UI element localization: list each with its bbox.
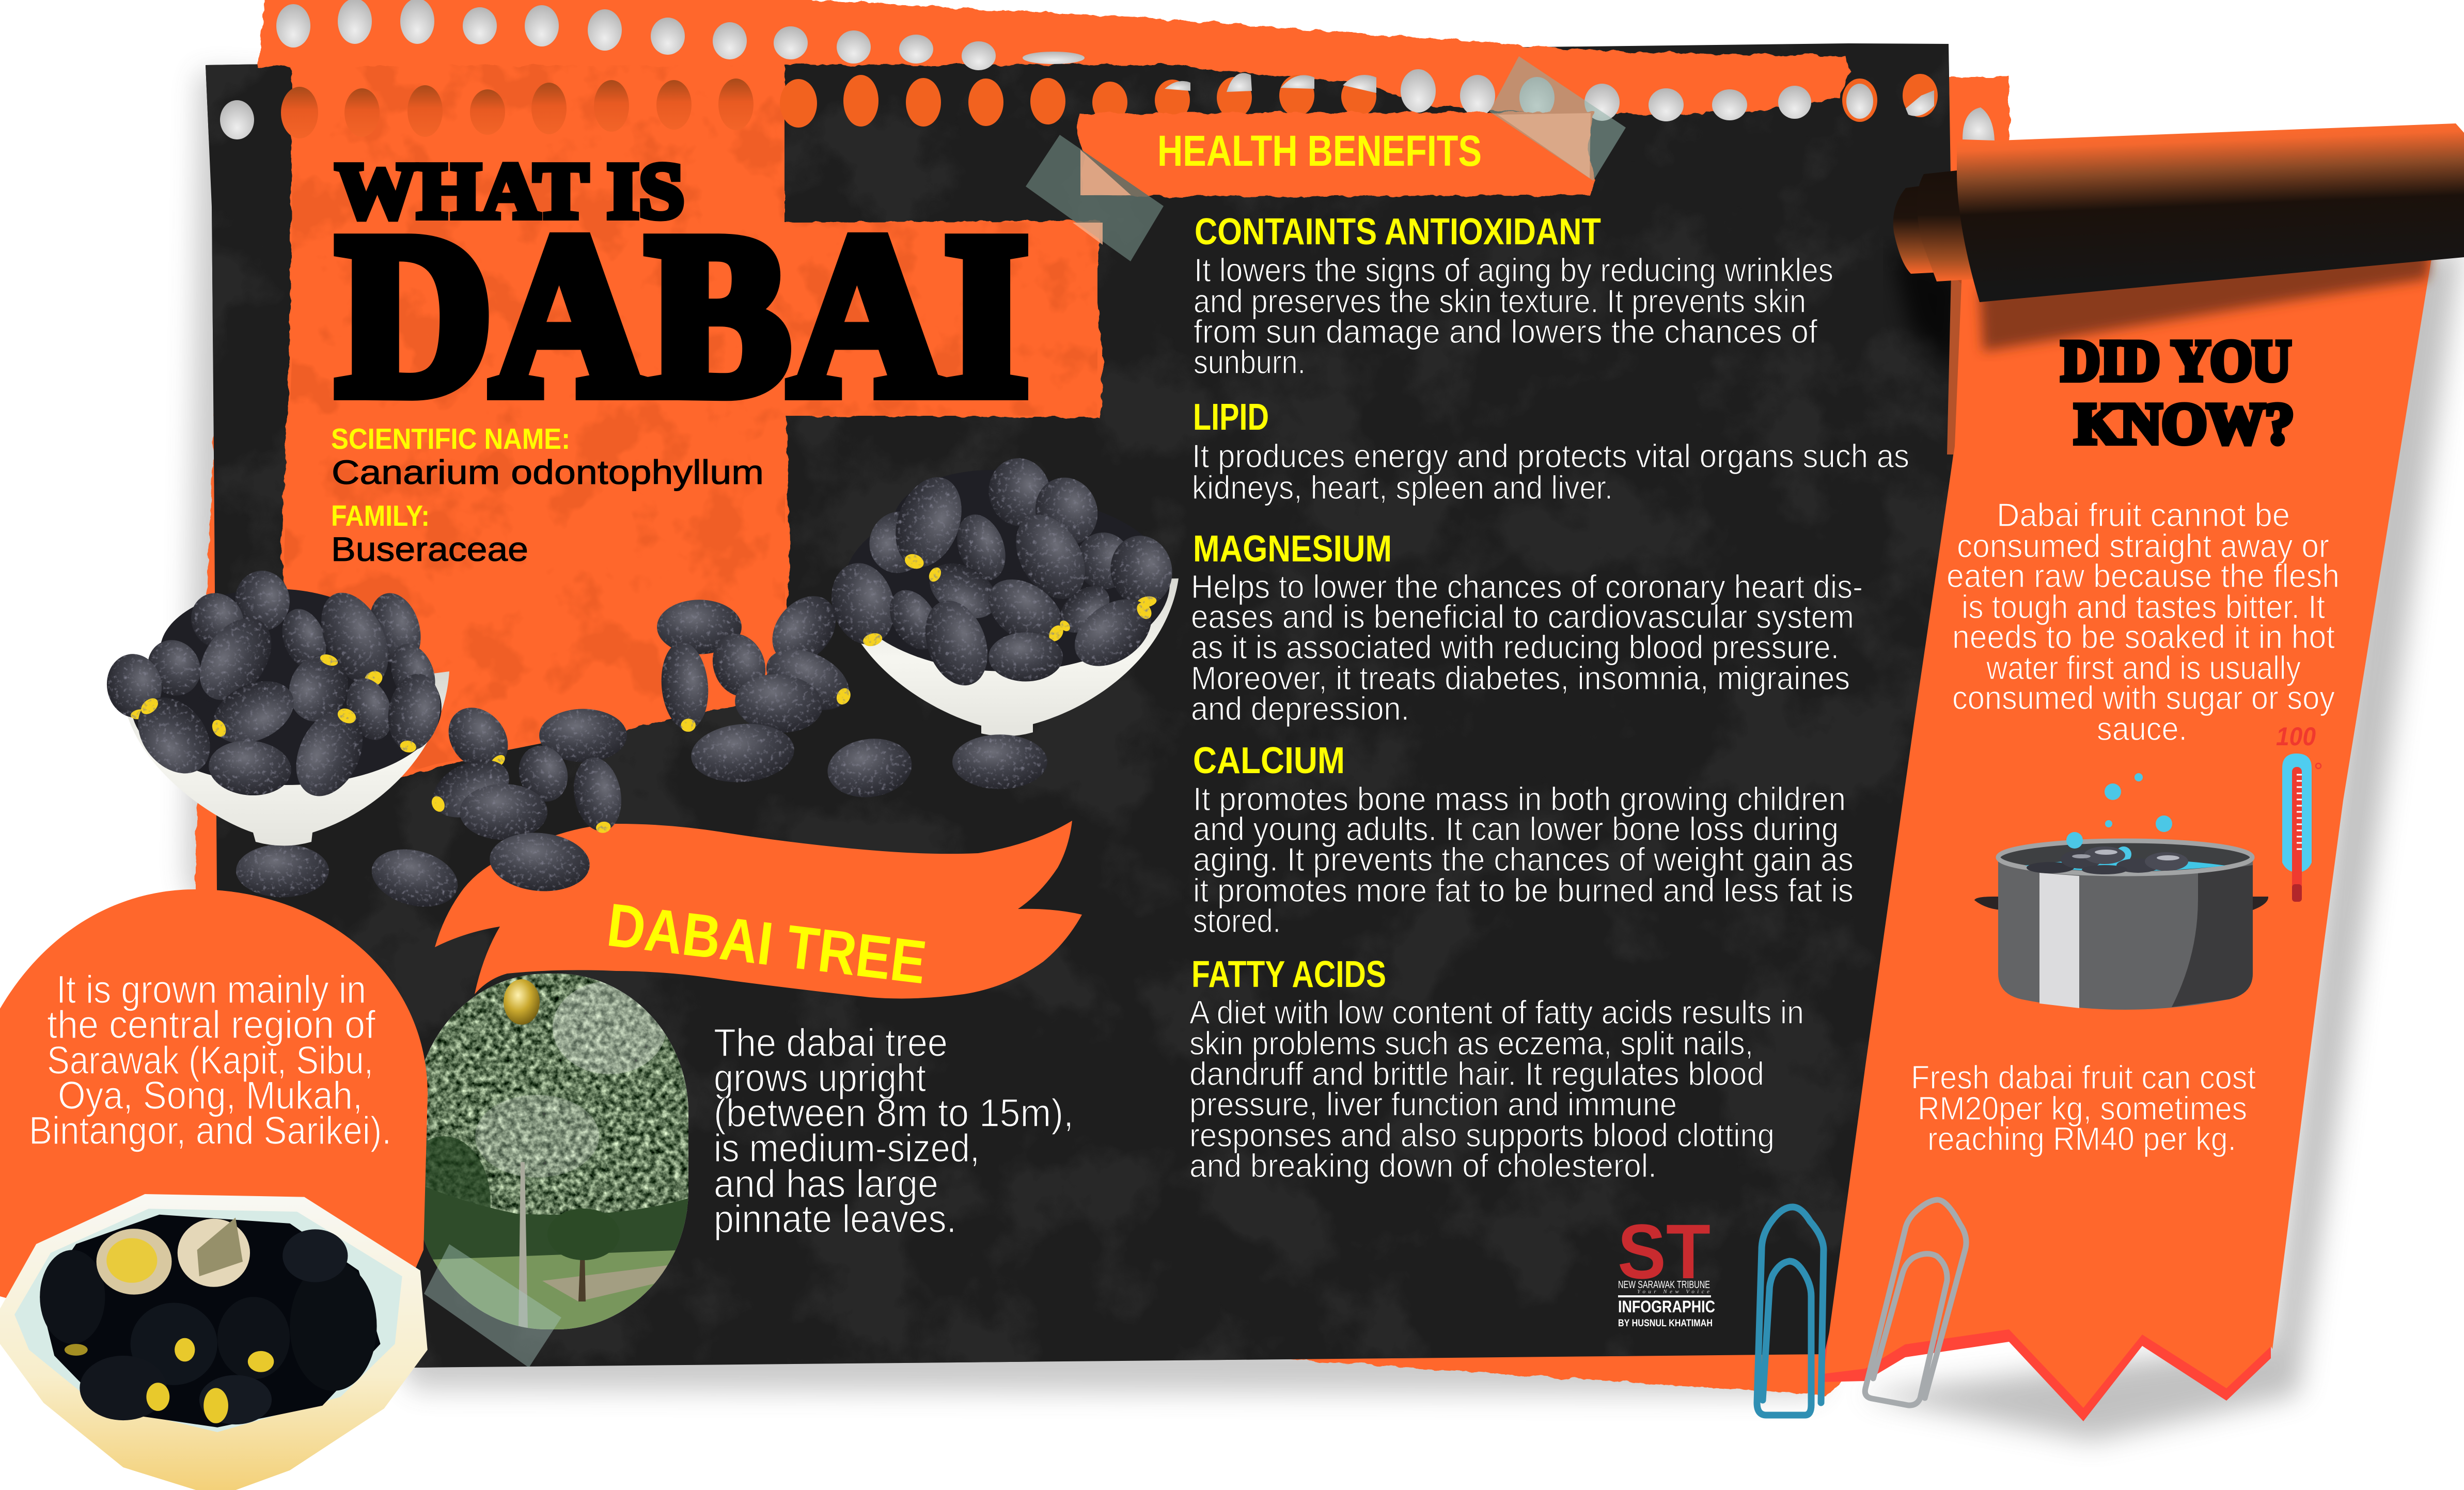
health benefit: antioxidant [1194,211,1833,381]
tree description: grows upright [714,1056,926,1100]
tree description: and has large [714,1162,938,1206]
notebook holes: orange on black [780,75,1376,128]
health benefit: calcium: CALCIUM [1193,740,1345,781]
dabai tree heading: DABAI TREE [604,891,930,997]
family [331,499,528,568]
tree description: (between 8m to 15m), [714,1091,1074,1135]
orange location circle [0,889,428,1394]
did you know text: Dabai fruit cannot be [1997,496,2290,534]
did you know text: consumed with sugar or soy [1952,679,2335,716]
photo: dabai tree [398,974,688,1329]
roller: paper roll [1957,123,2464,302]
health benefit: calcium: It promotes bone mass in both growing children [1193,780,1846,818]
health benefit: fatty acids [1189,954,1804,1184]
health benefit: calcium: it promotes more fat to be burned and less fat is [1193,872,1854,909]
black notebook page [206,43,1955,1368]
did you know heading [2061,329,2294,456]
top orange torn strip [259,0,1851,115]
health benefit: fatty acids: A diet with low content of fatty acids results in [1189,994,1804,1031]
bowl of dabai: right [823,453,1179,736]
location text: It is grown mainly in [56,968,366,1012]
health benefit: lipid: It produces energy and protects vital organs such as [1192,437,1909,475]
health benefit: magnesium [1191,528,1863,727]
health benefit: magnesium: and depression. [1191,690,1409,727]
scroll shadow [1859,248,2464,1441]
health benefit: antioxidant: It lowers the signs of aging by reducing wrinkles [1194,252,1833,289]
logo: new sarawak tribune: INFOGRAPHIC [1618,1297,1715,1316]
logo: new sarawak tribune: BY HUSNUL KHATIMAH [1618,1318,1713,1329]
price text [1911,1059,2256,1157]
scroll: red torn underlay [1818,1291,2271,1421]
notebook holes: second row [281,79,754,138]
icon: blue paper clip [1757,1207,1824,1415]
scientific name [331,422,764,491]
health benefit: fatty acids: FATTY ACIDS [1191,954,1386,995]
icon: silver paper clip [1865,1200,1966,1405]
health benefit: calcium: and young adults. It can lower bone loss during [1193,810,1839,848]
notebook holes: right end [1842,74,1995,140]
health benefit: antioxidant: sunburn. [1194,343,1306,381]
title: what is dabai: DABAI [337,187,1028,443]
health benefit: lipid: kidneys, heart, spleen and liver. [1192,469,1613,506]
roller: left tabs [1893,170,1978,281]
health benefit: fatty acids: responses and also supports blood clotting [1189,1117,1775,1154]
roller shadow [1980,248,2431,351]
title: what is dabai: WHAT IS [336,147,684,235]
photo: bowl of peeled dabai [0,1194,428,1490]
location text: the central region of [47,1003,376,1047]
scroll: darker side strip [1947,274,1983,454]
tape: right [1489,56,1626,181]
health benefit: lipid [1192,397,1909,506]
health benefit: fatty acids: dandruff and brittle hair. It regulates blood [1189,1055,1764,1092]
health benefit: magnesium: Helps to lower the chances of coronary heart dis- [1191,568,1863,605]
did you know text: sauce. [2097,710,2187,747]
scientific name: SCIENTIFIC NAME: [331,422,570,456]
scroll: shadow on black page [1890,248,1963,372]
health benefit: antioxidant: and preserves the skin texture. It prevents skin [1194,283,1806,320]
did you know text: eaten raw because the flesh [1947,557,2340,594]
tree description [714,1021,1074,1241]
did you know heading: DID YOU [2061,329,2291,393]
scattered dabai fruits [236,584,1047,916]
health benefit: calcium: aging. It prevents the chances of weight gain as [1193,841,1854,878]
page shadow [186,72,1859,1394]
price text: RM20per kg, sometimes [1918,1090,2247,1127]
panel: orange title block [281,56,1103,806]
health benefit: lipid: LIPID [1193,397,1269,438]
location text: Bintangor, and Sarikei). [29,1109,391,1153]
tree description: pinnate leaves. [714,1197,956,1241]
bowl of dabai: left [102,569,449,846]
did you know text: water first and is usually [1986,649,2301,686]
health benefits heading: HEALTH BENEFITS [1157,127,1482,175]
family: Buseraceae [331,530,528,568]
tape: tree photo [424,1244,561,1368]
tree description: The dabai tree [714,1021,948,1065]
logo: new sarawak tribune: Your New Voice [1637,1289,1709,1295]
notebook holes: torn grey remains [1165,69,1811,121]
health benefit: magnesium: MAGNESIUM [1193,528,1392,570]
panel: did you know scroll [1824,227,2438,1408]
icon: thermometer: 100 [2276,722,2316,751]
did you know text: is tough and tastes bitter. It [1961,588,2325,625]
banner: dabai tree [435,821,1082,998]
gold pin [504,979,540,1025]
did you know heading: KNOW? [2075,392,2294,456]
price text: reaching RM40 per kg. [1927,1120,2236,1157]
health benefit: fatty acids: pressure, liver function and immune [1189,1086,1677,1123]
health benefit: fatty acids: and breaking down of cholesterol. [1189,1147,1657,1184]
health benefit: antioxidant: CONTAINTS ANTIOXIDANT [1195,211,1601,253]
health benefit: magnesium: Moreover, it treats diabetes, insomnia, migraines [1191,660,1850,697]
location text: Sarawak (Kapit, Sibu, [47,1039,373,1083]
scientific name: Canarium odontophyllum [332,453,764,491]
did you know text [1947,496,2340,747]
tape: left [1026,135,1164,261]
did you know text: needs to be soaked it in hot [1952,618,2335,655]
health benefit: calcium [1193,740,1854,939]
icon: thermometer [2276,722,2321,902]
health benefit: magnesium: eases and is beneficial to cardiovascular system [1191,598,1854,635]
logo: new sarawak tribune: NEW SARAWAK TRIBUNE [1618,1279,1710,1291]
banner: health benefits [1077,112,1595,197]
cracked dabai with yellow flesh [97,1217,250,1295]
health benefit: antioxidant: from sun damage and lowers the chances of [1194,313,1817,350]
location text [29,968,391,1153]
did you know text: consumed straight away or [1957,527,2329,564]
price text: Fresh dabai fruit can cost [1911,1059,2256,1096]
tree description: is medium-sized, [714,1126,980,1170]
location text: Oya, Song, Mukah, [58,1074,363,1118]
health benefit: magnesium: as it is associated with reducing blood pressure. [1191,629,1839,666]
notebook holes: top row [220,0,1085,139]
family: FAMILY: [331,499,430,532]
back orange sheet [196,0,2009,1395]
health benefit: fatty acids: skin problems such as eczema, split nails, [1189,1025,1753,1062]
icon: cooking pot with dabai [1974,773,2268,1010]
logo: new sarawak tribune: ST [1618,1208,1710,1295]
health benefit: calcium: stored. [1193,902,1281,939]
